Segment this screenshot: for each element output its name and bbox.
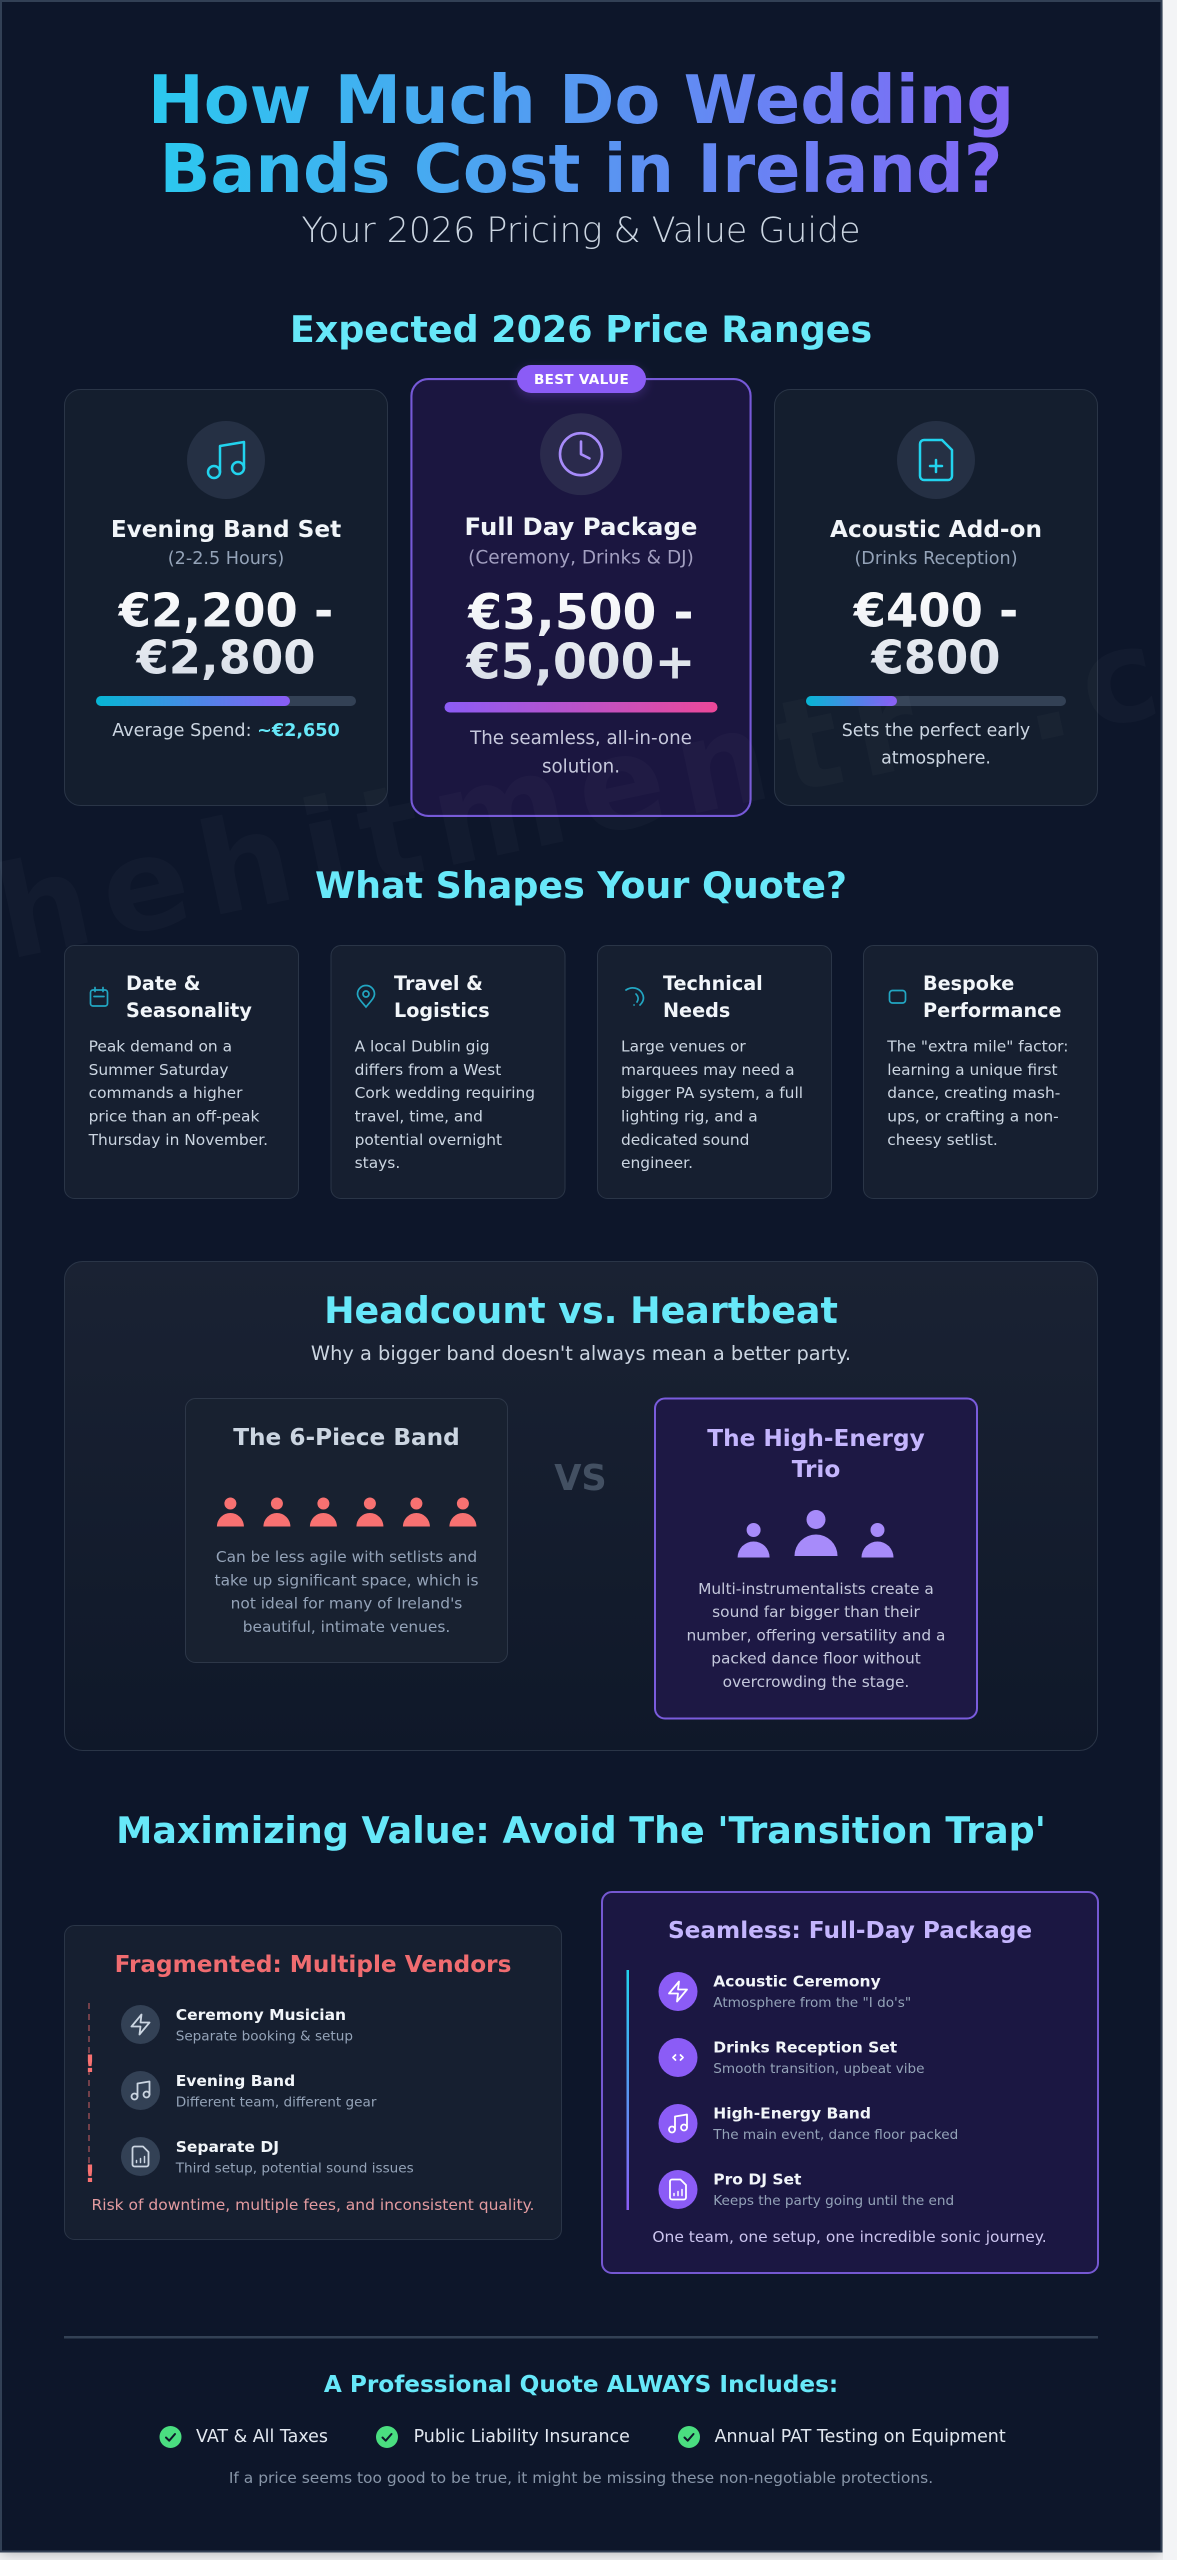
factor description: price than an off-peak (89, 1107, 259, 1125)
comparison description: beautiful, intimate venues. (243, 1618, 450, 1636)
item: pro dj set (658, 2170, 954, 2209)
factor description: The "extra mile" factor: (886, 1038, 1068, 1056)
description: Sets the perfect early (842, 721, 1030, 741)
factor description: commands a higher (89, 1084, 243, 1102)
factor title: Travel & (394, 972, 483, 995)
factor description: Cork wedding requiring (355, 1084, 535, 1102)
item: high-energy band: High-Energy Band (713, 2105, 871, 2123)
item: acoustic ceremony (658, 1972, 911, 2011)
factor description (355, 1038, 535, 1172)
card title: Evening Band Set (111, 516, 341, 543)
progress bar (96, 696, 356, 706)
item: separate dj: Separate DJ (176, 2138, 279, 2156)
heading: professional quote: A Professional Quote ALWAYS Includes: (324, 2371, 838, 2398)
icon: rectangle (890, 990, 906, 1003)
factor title (663, 972, 763, 1022)
factor description: differs from a West (355, 1061, 501, 1079)
comparison description: packed dance floor without (711, 1650, 921, 1668)
price: €2,800 (135, 630, 316, 684)
description (842, 721, 1030, 768)
icon: map pin (358, 986, 374, 1007)
icon: clock (540, 413, 622, 495)
description: solution. (542, 756, 620, 777)
price: €3,500 - (467, 585, 694, 641)
item: high-energy band (658, 2104, 958, 2143)
title (148, 61, 1014, 208)
factor description: engineer. (621, 1154, 693, 1172)
price: €2,200 - (118, 584, 333, 638)
comparison description: take up significant space, which is (215, 1571, 478, 1589)
factor description: dedicated sound (621, 1131, 749, 1149)
item: pro dj set: Pro DJ Set (713, 2171, 802, 2189)
comparison title: The High-Energy (707, 1425, 925, 1452)
price: €400 - (853, 584, 1018, 638)
comparison description: number, offering versatility and a (687, 1626, 945, 1644)
icon: six people (217, 1498, 476, 1526)
panel title: Seamless: Full-Day Package (668, 1917, 1032, 1944)
description: atmosphere. (881, 748, 991, 768)
item: drinks reception set: Smooth transition, upbeat vibe (713, 2061, 925, 2077)
factor title: Bespoke (923, 972, 1014, 995)
factor description: Thursday in November. (88, 1131, 268, 1149)
item: ceremony musician (121, 2005, 353, 2045)
factor title (126, 972, 252, 1022)
factor description: travel, time, and (355, 1107, 483, 1125)
badge: best value (517, 365, 646, 393)
factor card: date and seasonality (64, 946, 298, 1198)
item: high-energy band: The main event, dance floor packed (712, 2127, 958, 2143)
factor title: Date & (126, 972, 200, 995)
heading: maximizing value: Maximizing Value: Avoid The 'Transition Trap' (116, 1809, 1046, 1852)
subtitle: Your 2026 Pricing & Value Guide (301, 211, 861, 251)
checklist item: pat testing: Annual PAT Testing on Equipment (715, 2427, 1006, 2447)
factor card: bespoke performance (864, 946, 1098, 1198)
progress bar (444, 702, 718, 712)
item: evening band (121, 2071, 377, 2111)
icon: music (187, 421, 265, 499)
panel footnote: Risk of downtime, multiple fees, and inconsistent quality. (92, 2196, 534, 2214)
factor description: learning a unique first (887, 1061, 1058, 1079)
factor description: Peak demand on a (89, 1038, 232, 1056)
icon: file plus (897, 421, 975, 499)
factor title: Performance (923, 999, 1062, 1022)
panel: acoustic add-on (774, 390, 1098, 806)
factor description: ups, or crafting a non- (887, 1107, 1059, 1125)
panel: evening band set (64, 390, 388, 806)
progress bar (806, 696, 1066, 706)
factor description: Large venues or (621, 1038, 746, 1056)
item: ceremony musician: Ceremony Musician (176, 2006, 346, 2024)
panel title: Fragmented: Multiple Vendors (115, 1951, 511, 1978)
factor title: Needs (663, 999, 730, 1022)
comparison description: Can be less agile with setlists and (216, 1548, 477, 1566)
heading: what shapes your quote: What Shapes Your Quote? (315, 864, 847, 907)
card title: Acoustic Add-on (830, 516, 1042, 543)
item: evening band: Different team, different gear (176, 2095, 377, 2111)
card duration: (2-2.5 Hours) (168, 549, 284, 569)
factor title (923, 972, 1062, 1022)
factor description: Summer Saturday (89, 1061, 229, 1079)
item: separate dj (121, 2137, 414, 2177)
icon: calendar (90, 988, 108, 1006)
panel: full day package (411, 379, 751, 816)
comparison description: not ideal for many of Ireland's (231, 1595, 462, 1613)
card duration: (Drinks Reception) (854, 549, 1018, 569)
icon: sound waves (626, 988, 643, 1005)
title: How Much Do Wedding (148, 61, 1014, 139)
card duration: (Ceremony, Drinks & DJ) (468, 547, 694, 568)
comparison description: overcrowding the stage. (723, 1673, 909, 1691)
factor card: technical needs (598, 946, 832, 1198)
right page margin (1163, 0, 1177, 2560)
factor description (621, 1038, 803, 1172)
factor description: A local Dublin gig (355, 1038, 490, 1056)
comparison description: Multi-instrumentalists create a (698, 1580, 934, 1598)
panel: fragmented vendors (64, 1926, 562, 2240)
factor description (88, 1038, 268, 1149)
factor title: Logistics (394, 999, 490, 1022)
average spend: Average Spend: ~€2,650 (112, 721, 340, 741)
price (853, 584, 1018, 684)
dashed timeline with warnings: ! (85, 2160, 95, 2188)
badge: best value: BEST VALUE (534, 372, 629, 388)
comparison description (215, 1548, 478, 1636)
description: The seamless, all-in-one (469, 728, 692, 749)
factor description: bigger PA system, a full (621, 1084, 803, 1102)
factor description: cheesy setlist. (887, 1131, 998, 1149)
factor description (886, 1038, 1068, 1149)
dashed timeline with warnings: ! (85, 2050, 95, 2078)
comparison description: sound far bigger than their (712, 1603, 921, 1621)
item: drinks reception set: Drinks Reception Set (713, 2039, 898, 2057)
card title: Full Day Package (465, 512, 697, 541)
factor description: stays. (355, 1154, 400, 1172)
checklist item: insurance: Public Liability Insurance (414, 2427, 630, 2447)
price (466, 585, 695, 690)
factor title (394, 972, 490, 1022)
panel footnote: One team, one setup, one incredible sonic journey. (652, 2228, 1047, 2246)
comparison: high energy trio (655, 1398, 977, 1718)
timeline line (626, 1970, 629, 2210)
comparison description (687, 1580, 945, 1691)
divider (64, 2336, 1098, 2338)
description (469, 728, 692, 777)
comparison: six piece band (186, 1398, 508, 1662)
factor description: dance, creating mash- (887, 1084, 1060, 1102)
panel: seamless package (602, 1892, 1098, 2273)
item: pro dj set: Keeps the party going until the end (713, 2193, 954, 2209)
factor title: Seasonality (126, 999, 252, 1022)
dashed timeline with warnings (85, 2003, 95, 2188)
price: €5,000+ (466, 634, 695, 690)
factor description: marquees may need a (621, 1061, 795, 1079)
title: Bands Cost in Ireland? (159, 130, 1003, 208)
icon: three people (738, 1510, 894, 1558)
item: evening band: Evening Band (176, 2072, 295, 2090)
price: €800 (870, 630, 1001, 684)
factor description: lighting rig, and a (621, 1107, 758, 1125)
factor card: travel and logistics (331, 946, 565, 1198)
item: acoustic ceremony: Acoustic Ceremony (713, 1973, 881, 1991)
factor title: Technical (663, 972, 763, 995)
heading: price ranges: Expected 2026 Price Ranges (290, 308, 872, 351)
comparison title: The 6-Piece Band (233, 1424, 460, 1451)
item: acoustic ceremony: Atmosphere from the "I do's" (713, 1995, 911, 2011)
subheading: Why a bigger band doesn't always mean a better party. (311, 1342, 851, 1365)
heading: headcount vs heartbeat: Headcount vs. Heartbeat (324, 1289, 838, 1332)
footer note: If a price seems too good to be true, it might be missing these non-negotiable protections. (229, 2469, 933, 2487)
comparison title (707, 1425, 925, 1483)
price (118, 584, 333, 684)
item: separate dj: Third setup, potential sound issues (175, 2161, 414, 2177)
item: ceremony musician: Separate booking & setup (176, 2029, 353, 2045)
checklist item: vat: VAT & All Taxes (196, 2427, 328, 2447)
panel: headcount vs heartbeat (64, 1262, 1098, 1750)
factor description: potential overnight (355, 1131, 502, 1149)
comparison title: Trio (792, 1456, 840, 1483)
item: drinks reception set (658, 2038, 925, 2077)
vs label: VS (554, 1458, 607, 1499)
